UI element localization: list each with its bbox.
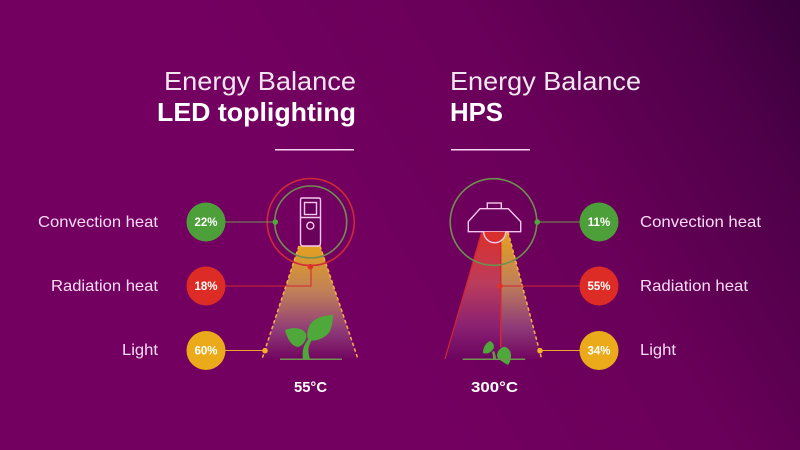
badge: HPS radiation 55%	[580, 266, 618, 306]
heading: LED toplighting	[157, 66, 356, 127]
badge: LED convection 22%: 22%	[194, 217, 218, 229]
temperature: HPS 300°C: 300°C	[471, 379, 518, 396]
labels: HPS: Radiation heat	[640, 278, 749, 295]
panel: HPS diagram	[445, 179, 581, 365]
icon: HPS lamp	[468, 203, 521, 243]
HPS light beam	[445, 232, 542, 359]
badge: LED radiation 18%	[186, 266, 226, 306]
panel: LED toplighting diagram	[225, 178, 358, 360]
labels: LED: Radiation heat	[51, 278, 159, 295]
heading: HPS: Energy Balance	[450, 66, 641, 96]
connector: light	[537, 348, 581, 354]
connector: light	[225, 348, 268, 354]
labels: HPS: Convection heat	[640, 214, 762, 231]
badge: HPS convection 11%	[580, 202, 618, 242]
HPS heat circle	[450, 179, 537, 265]
ground line	[463, 358, 525, 360]
icon: small plant	[483, 341, 511, 365]
badge: LED light 60%	[186, 331, 226, 370]
LED light beam	[262, 246, 358, 359]
labels: HPS: Light	[640, 342, 677, 359]
badge: HPS light 34%: 34%	[587, 346, 611, 358]
badge: LED radiation 18%: 18%	[194, 281, 218, 293]
connector: radiation heat	[497, 283, 581, 289]
labels: LED: Convection heat	[38, 214, 159, 231]
badge: HPS light 34%	[580, 331, 618, 370]
heading: HPS: HPS	[450, 97, 503, 127]
badge: HPS radiation 55%: 55%	[587, 281, 611, 293]
connector: convection heat	[225, 219, 278, 225]
badge: LED light 60%: 60%	[194, 346, 218, 358]
heading: LED toplighting: Energy Balance	[164, 66, 356, 96]
badge: HPS convection 11%: 11%	[588, 217, 610, 229]
badge: LED convection 22%	[186, 202, 226, 242]
heading: LED toplighting: LED toplighting	[157, 97, 356, 127]
temperature: LED 55°C: 55°C	[294, 379, 327, 396]
labels: LED: Light	[122, 342, 159, 359]
labels: HPS	[640, 214, 762, 359]
LED heat circles	[267, 178, 354, 266]
connector: convection heat	[534, 219, 581, 225]
icon: LED lamp	[300, 198, 320, 246]
connector: radiation heat	[225, 264, 313, 286]
heading: HPS	[450, 66, 641, 127]
icon: large plant	[285, 315, 333, 359]
ground line	[280, 358, 342, 360]
labels: LED	[38, 214, 159, 359]
